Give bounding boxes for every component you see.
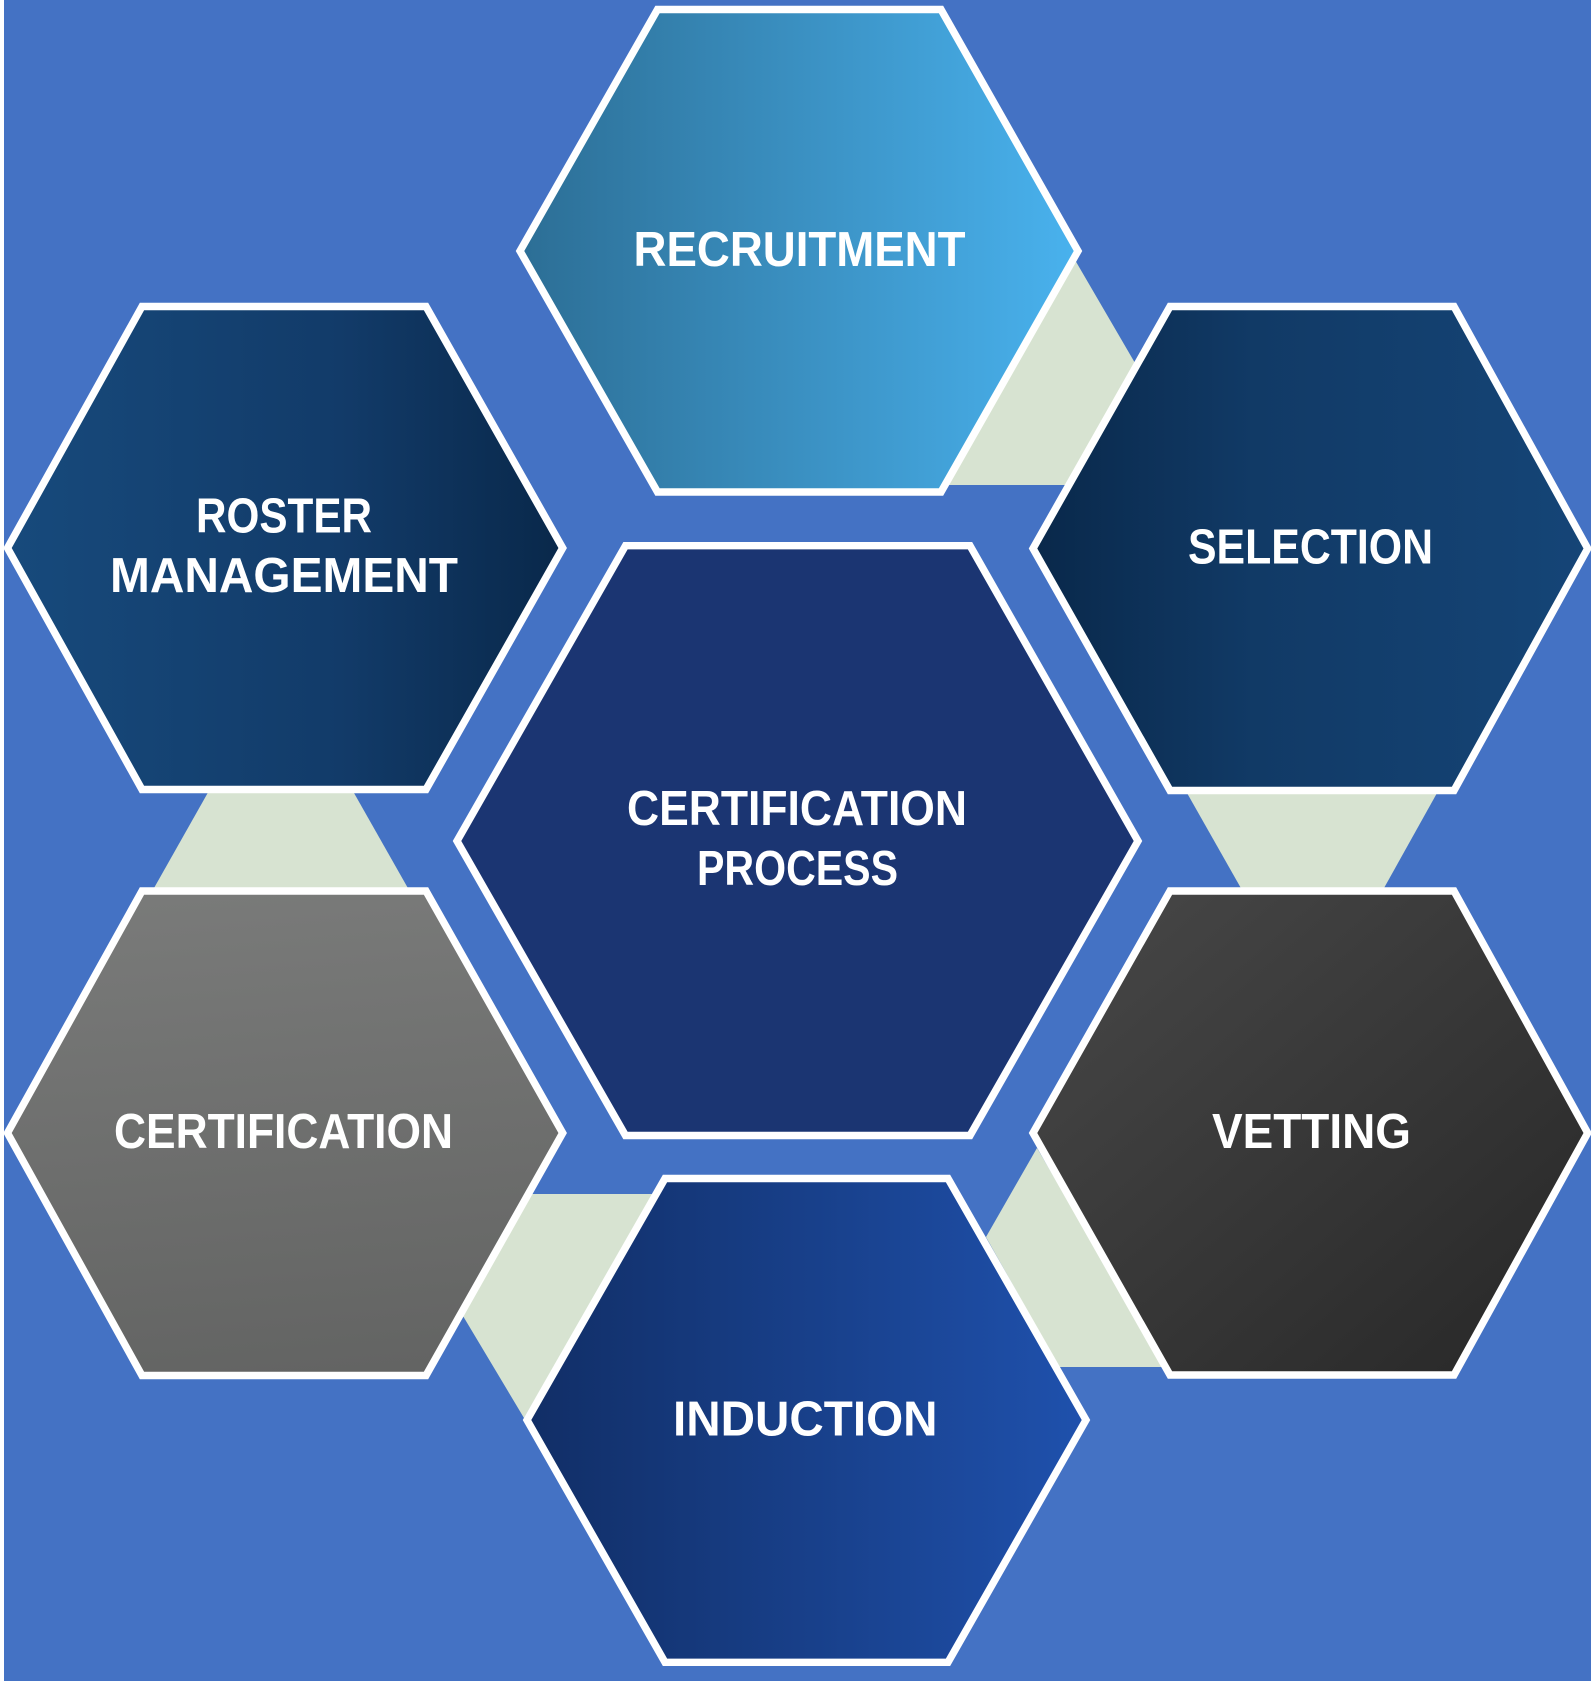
- hexagon: vetting: [1033, 891, 1588, 1375]
- hexagon: roster management: MANAGEMENT: [110, 549, 458, 603]
- connector: induction to certification: [450, 1194, 654, 1418]
- connector: certification to roster management: [153, 790, 409, 890]
- connector: vetting to induction: [986, 1148, 1165, 1367]
- hexagon: central certification process: CERTIFICATION: [627, 782, 967, 836]
- hexagon: central certification process: PROCESS: [697, 842, 898, 896]
- connector: recruitment to selection: [948, 260, 1135, 485]
- hexagon: central certification process: [457, 546, 1138, 1136]
- hexagon: selection: [1033, 306, 1588, 790]
- hexagon: roster management: [8, 306, 563, 790]
- hexagon: certification: [8, 891, 563, 1376]
- hexagon: induction: [527, 1178, 1086, 1662]
- connector: selection to vetting: [1185, 790, 1439, 890]
- hexagon: recruitment: RECRUITMENT: [634, 223, 966, 277]
- hexagon: selection: SELECTION: [1188, 520, 1433, 574]
- hexagon: vetting: VETTING: [1212, 1105, 1411, 1159]
- hexagon: roster management: ROSTER: [196, 490, 372, 544]
- hexagon: certification: CERTIFICATION: [114, 1105, 453, 1159]
- hexagon: recruitment: [520, 10, 1078, 492]
- hexagon: induction: INDUCTION: [673, 1392, 938, 1446]
